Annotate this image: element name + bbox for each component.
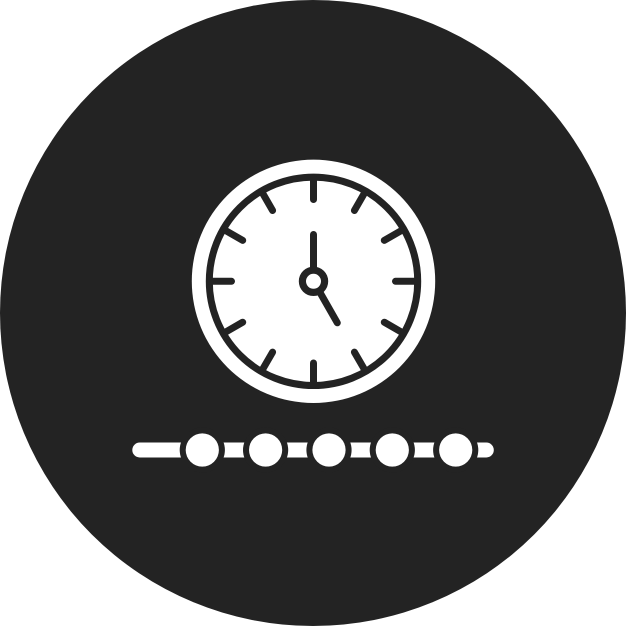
clock inner ring (209, 177, 418, 386)
clock outer rim (192, 160, 435, 403)
timeline bar (140, 442, 486, 458)
clock centre hub (302, 270, 325, 292)
timeline (140, 427, 486, 473)
icon: wall clock (192, 160, 435, 403)
clock hands (314, 234, 337, 323)
timeline nodes (186, 433, 472, 467)
timeline node gaps (180, 427, 478, 473)
clock hour ticks (210, 178, 417, 384)
